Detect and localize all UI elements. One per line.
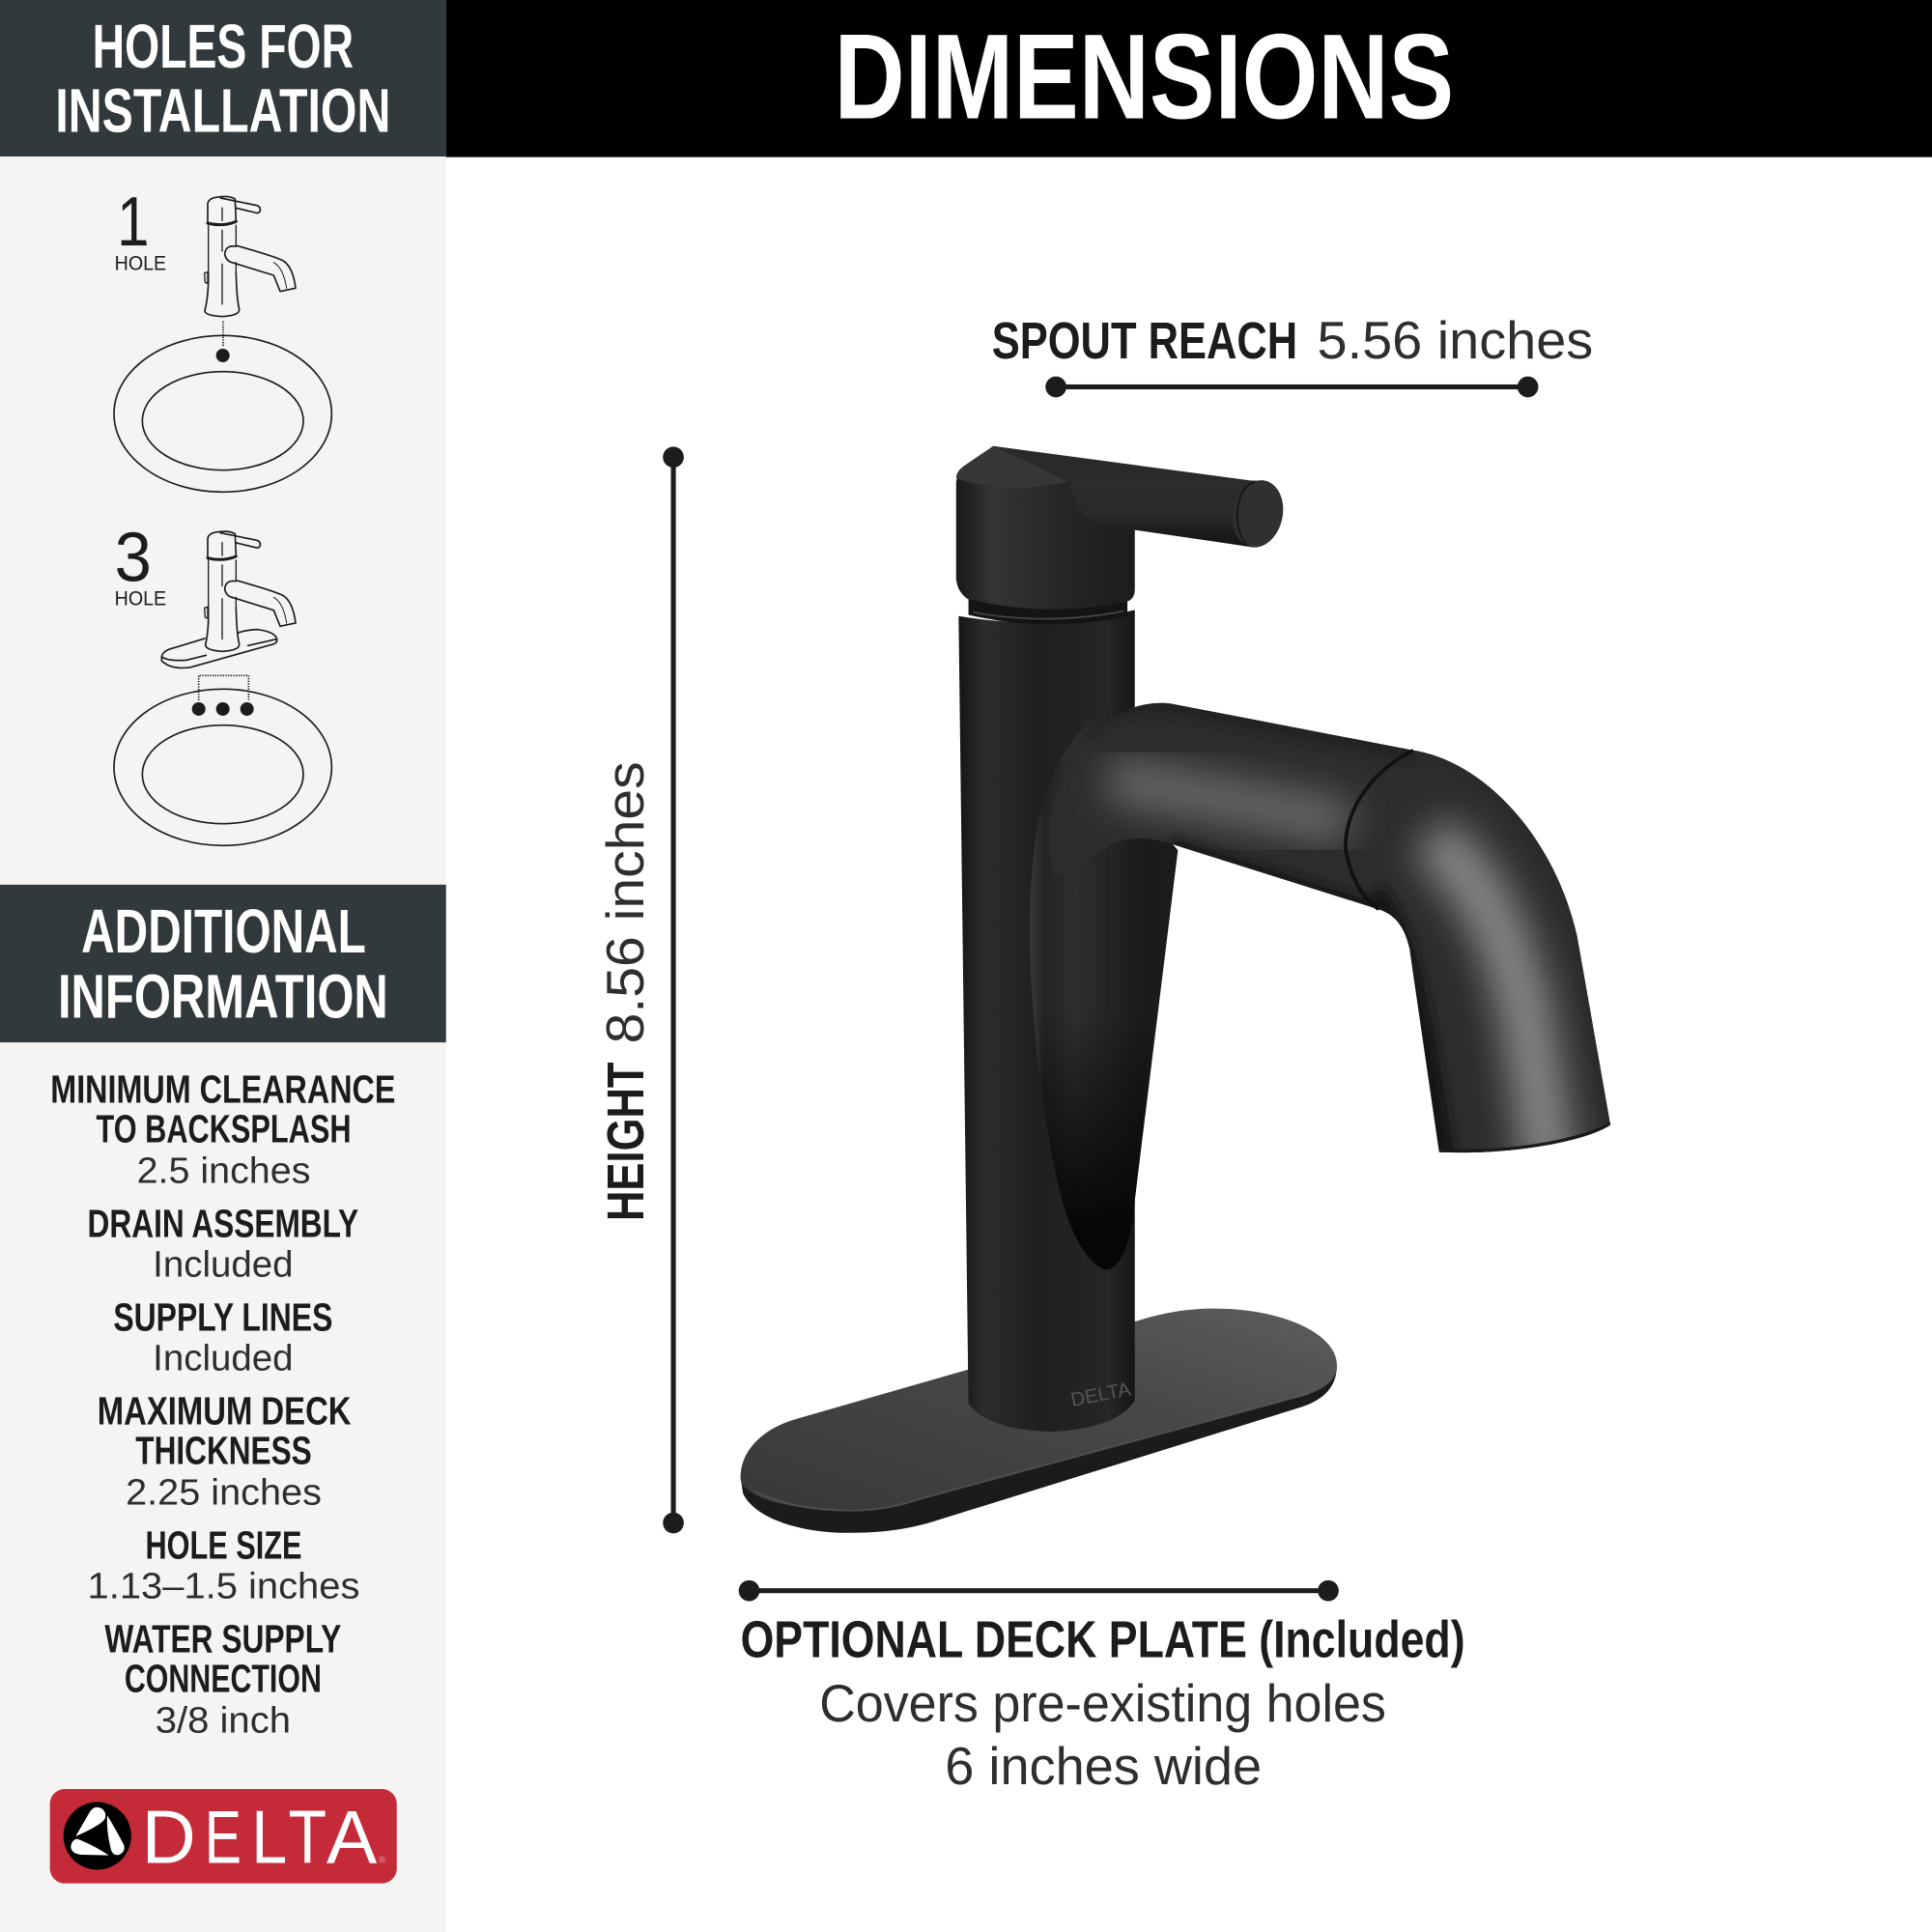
text block: minimum clearance (50, 1067, 395, 1191)
dimension: spout reach (992, 310, 1593, 397)
faucet body (958, 610, 1135, 1432)
icon: three hole installation: 3 (115, 519, 152, 597)
header: additional information (0, 885, 446, 1042)
text block: hole size (88, 1523, 359, 1606)
text block: minimum clearance: TO BACKSPLASH (96, 1106, 352, 1151)
text block: drain assembly (88, 1202, 358, 1285)
text block: supply lines: SUPPLY LINES (113, 1295, 332, 1340)
text block: maximum deck thickness: 2.25 inches (126, 1471, 322, 1513)
header: holes for installation (0, 0, 446, 156)
text block: maximum deck thickness: MAXIMUM DECK (98, 1388, 352, 1433)
logo: delta: L (251, 1797, 287, 1880)
text block: drain assembly: Included (153, 1243, 294, 1285)
logo: delta: ® (379, 1856, 386, 1866)
text block: water supply connection: CONNECTION (125, 1656, 322, 1700)
icon: one hole installation (114, 183, 331, 492)
dimension: spout reach: SPOUT REACH (992, 313, 1297, 370)
title: dimensions: DIMENSIONS (835, 10, 1454, 144)
sidebar background (0, 0, 446, 1932)
dimension: height: 8.56 inches (595, 761, 655, 1043)
text block: water supply connection (104, 1616, 341, 1741)
text block: water supply connection: WATER SUPPLY (104, 1616, 341, 1661)
faucet body: DELTA (1069, 1378, 1133, 1411)
text block: supply lines (113, 1295, 332, 1378)
logo: delta: D (142, 1797, 196, 1880)
dimension: optional deck plate: OPTIONAL DECK PLATE (Included) (741, 1612, 1465, 1669)
header: holes for installation: INSTALLATION (55, 75, 390, 145)
logo: delta (50, 1789, 397, 1884)
handle lever (1071, 475, 1290, 553)
text block: water supply connection: 3/8 inch (156, 1699, 291, 1741)
title: dimensions (446, 0, 1932, 157)
text block: hole size: 1.13–1.5 inches (88, 1565, 359, 1606)
icon: one hole installation: 1 (117, 183, 149, 261)
header: additional information: ADDITIONAL (81, 896, 366, 966)
text block: hole size: HOLE SIZE (146, 1523, 301, 1568)
icon: one hole installation: HOLE (115, 250, 166, 274)
deck plate (741, 1309, 1337, 1533)
text block: minimum clearance: 2.5 inches (137, 1150, 310, 1191)
text block: maximum deck thickness: THICKNESS (135, 1428, 312, 1472)
text block: maximum deck thickness (98, 1388, 352, 1513)
text block: drain assembly: DRAIN ASSEMBLY (88, 1202, 358, 1246)
dimension: height (595, 446, 684, 1533)
faucet product image (741, 446, 1613, 1533)
header: holes for installation: HOLES FOR (93, 12, 354, 81)
dimension: optional deck plate (739, 1580, 1465, 1796)
text block: minimum clearance: MINIMUM CLEARANCE (50, 1067, 395, 1112)
handle cap (956, 446, 1269, 624)
spout (1087, 703, 1611, 1153)
dimension: optional deck plate: 6 inches wide (945, 1736, 1262, 1796)
swoosh bracket (1030, 707, 1178, 1269)
logo: delta: T (288, 1797, 327, 1880)
icon: three hole installation: HOLE (115, 585, 166, 610)
dimension: optional deck plate: Covers pre-existing holes (819, 1673, 1386, 1733)
logo: delta: A (327, 1797, 377, 1880)
header: additional information: INFORMATION (58, 962, 388, 1032)
logo: delta: E (205, 1797, 242, 1880)
text block: supply lines: Included (153, 1337, 294, 1378)
icon: three hole installation (114, 519, 331, 845)
dimension: height: HEIGHT (598, 1062, 655, 1221)
dimension: spout reach: 5.56 inches (1318, 310, 1593, 370)
